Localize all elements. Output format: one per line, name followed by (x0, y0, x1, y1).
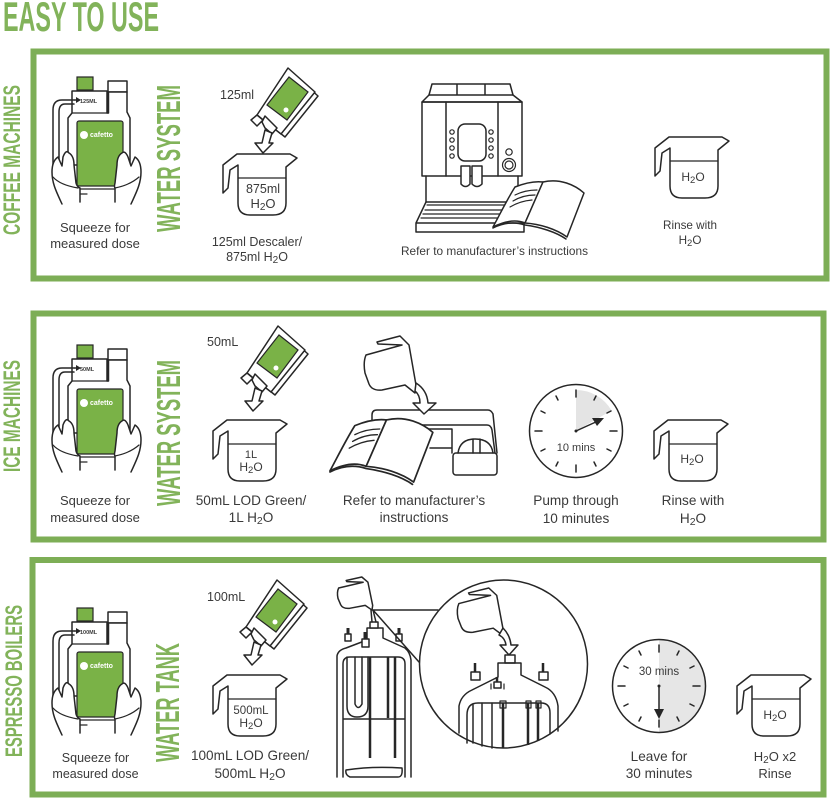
icon: 30 minute clock (612, 640, 706, 732)
mix caption: 1L H (229, 510, 273, 527)
rinse caption: Rinse (758, 766, 792, 781)
icon: rinse jug (737, 675, 811, 736)
icon: measuring jug: H (239, 716, 248, 730)
pump caption: 10 minutes (543, 511, 609, 526)
rinse caption: 2 (690, 516, 696, 528)
icon: measuring jug: 500mL (233, 705, 269, 717)
icon: squeeze bottle: 100ML (80, 630, 98, 636)
icon: measuring jug (223, 154, 297, 215)
icon: measuring jug: O (253, 460, 263, 474)
icon: rinse jug: O (777, 708, 787, 722)
icon: measuring jug: 2 (248, 721, 253, 732)
squeeze caption: measured dose (52, 767, 139, 781)
panel: ice machines (0, 314, 824, 540)
icon: measuring jug: 1L (245, 449, 257, 461)
rinse caption: Rinse with (663, 219, 717, 232)
dose amount: 100mL (207, 590, 245, 604)
mix caption: O (278, 250, 288, 264)
icon: boiler being filled (337, 577, 438, 777)
icon: measuring jug (213, 420, 287, 481)
manufacturer caption: instructions (380, 510, 449, 525)
rinse caption: O (692, 234, 701, 247)
icon: rinse jug: O (694, 452, 704, 466)
squeeze caption: measured dose (50, 236, 140, 251)
panel: coffee machines (0, 52, 826, 278)
icon: squeeze bottle: cafetto (90, 400, 113, 407)
rinse caption: O x2 (769, 749, 796, 764)
rinse caption: Rinse with (662, 493, 724, 508)
icon: 10 minute clock: 10 mins (557, 442, 596, 454)
squeeze caption: Squeeze for (60, 493, 131, 508)
icon: measuring jug: 2 (248, 465, 253, 476)
manufacturer caption: Refer to manufacturer’s instructions (401, 244, 588, 258)
icon: descaler pouch (241, 326, 308, 411)
leave caption: Leave for (631, 749, 688, 764)
icon: measuring jug: 2 (260, 202, 266, 213)
icon: squeeze bottle: cafetto (90, 132, 113, 139)
icon: rinse jug: 2 (772, 713, 777, 724)
icon: rinse jug: 2 (689, 457, 694, 468)
panel frame (34, 314, 824, 540)
rinse caption: O (696, 511, 706, 526)
icon: coffee machine with manual (416, 84, 584, 239)
subheading: WATER SYSTEM (150, 360, 187, 506)
squeeze caption: Squeeze for (60, 220, 131, 235)
rinse caption: 2 (763, 755, 769, 766)
mix caption: 2 (269, 771, 275, 783)
mix caption: O (263, 510, 273, 525)
icon: rinse jug (655, 137, 729, 198)
rinse caption: H (754, 749, 796, 766)
mix caption: O (275, 766, 286, 781)
panel frame (32, 560, 824, 794)
icon: pouring jug into ice machine with manual (330, 336, 497, 484)
category label: ESPRESSO BOILERS (1, 605, 28, 757)
mix caption: 2 (273, 255, 279, 266)
dose amount: 50mL (207, 335, 238, 349)
mix caption: 125ml Descaler/ (212, 235, 303, 249)
icon: rinse jug (654, 420, 728, 481)
icon: magnified boiler detail (420, 580, 588, 748)
mix caption: 2 (257, 515, 263, 527)
icon: descaler pouch (240, 580, 307, 665)
icon: measuring jug: H (239, 460, 248, 474)
icon: rinse jug: H (681, 170, 690, 184)
icon: squeeze bottle (52, 77, 141, 204)
icon: squeeze bottle: 125ML (80, 99, 98, 105)
rinse caption: 2 (687, 238, 692, 249)
manufacturer caption: Refer to manufacturer’s (343, 493, 485, 508)
icon: measuring jug: 875ml (246, 182, 280, 196)
icon: measuring jug: O (265, 196, 276, 211)
icon: measuring jug: O (253, 716, 263, 730)
icon: rinse jug: 2 (690, 175, 695, 186)
icon: measuring jug (213, 675, 287, 736)
dose amount: 125ml (220, 88, 254, 102)
pump caption: Pump through (533, 493, 619, 508)
icon: measuring jug: H (250, 196, 260, 211)
icon: 30 minute clock: 30 mins (639, 666, 679, 678)
icon: squeeze bottle (52, 345, 141, 472)
icon: squeeze bottle: cafetto (90, 663, 113, 670)
icon: rinse jug: O (695, 170, 705, 184)
icon: descaler pouch (251, 68, 318, 153)
icon: squeeze bottle (52, 608, 141, 735)
icon: rinse jug: H (763, 708, 772, 722)
rinse caption: H (679, 234, 701, 249)
icon: squeeze bottle: 50ML (80, 367, 95, 373)
rinse caption: H (680, 511, 706, 528)
mix caption: 50mL LOD Green/ (196, 493, 307, 508)
squeeze caption: Squeeze for (62, 751, 129, 765)
squeeze caption: measured dose (50, 510, 140, 525)
icon: 10 minute clock (530, 384, 622, 478)
panel frame (34, 52, 826, 278)
mix caption: 500mL H (214, 766, 286, 783)
panel: espresso boilers (1, 560, 824, 794)
icon: rinse jug: H (680, 452, 689, 466)
subheading: WATER TANK (149, 643, 186, 762)
mix caption: 875ml H (226, 250, 288, 266)
mix caption: 100mL LOD Green/ (191, 748, 309, 763)
leave caption: 30 minutes (626, 766, 692, 781)
